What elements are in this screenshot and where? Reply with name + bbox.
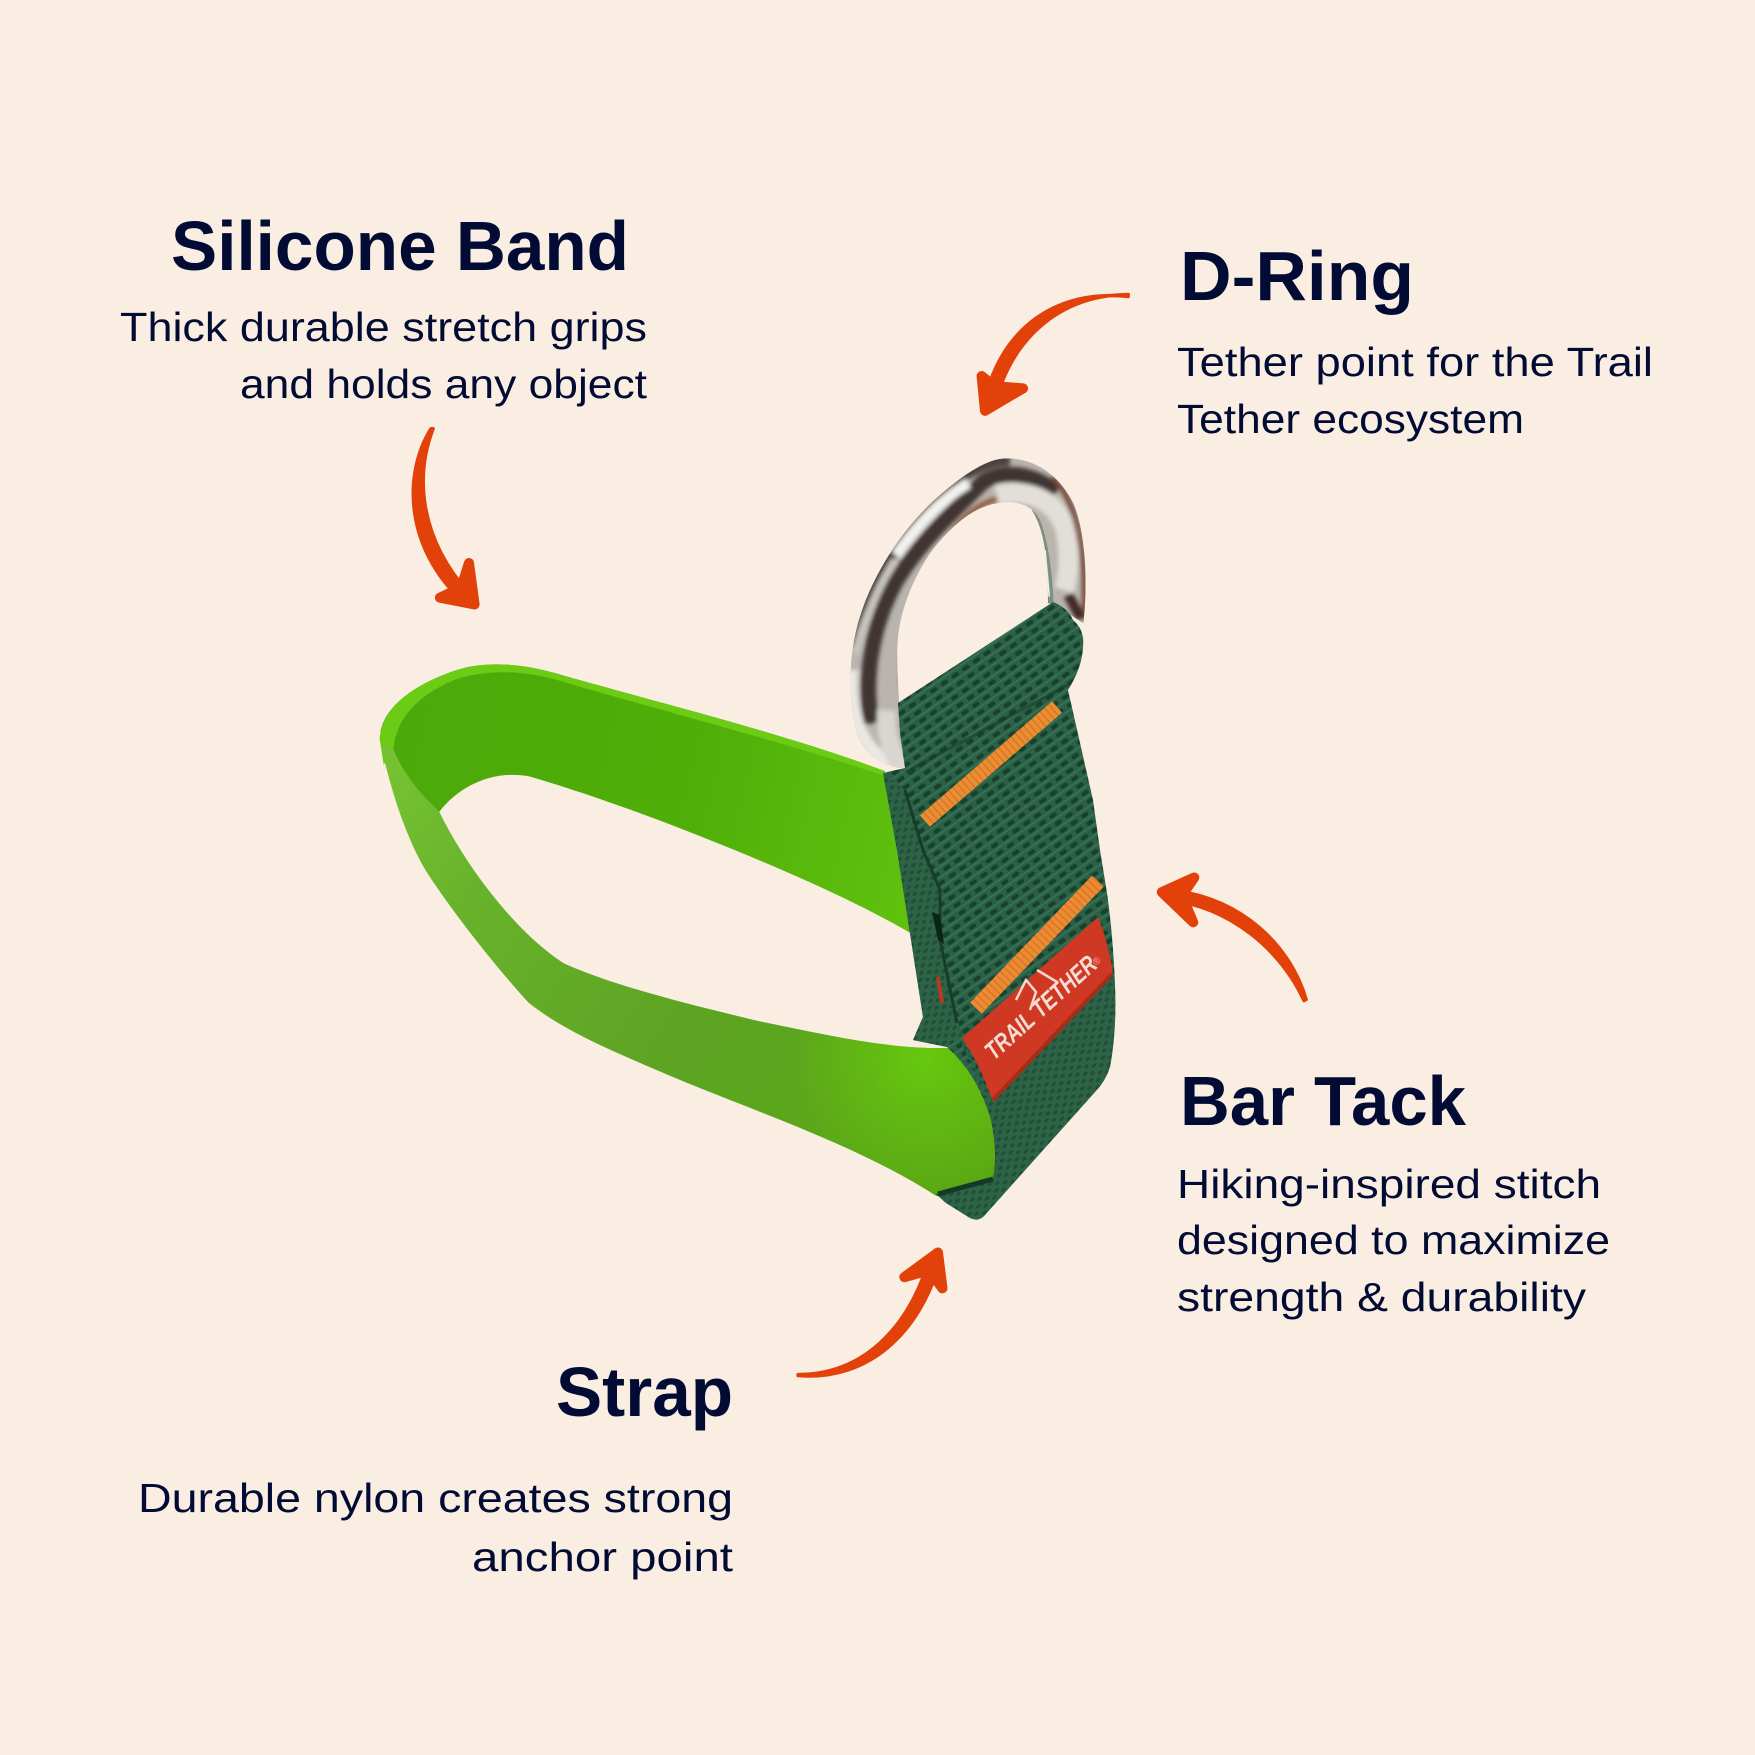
D-ring	[850, 458, 1086, 768]
band shadow on strap	[938, 1179, 993, 1194]
text block: Silicone Band description: Thick durable stretch grips	[120, 304, 647, 350]
arrow: to silicone band	[413, 429, 475, 604]
bar tack stitch: upper	[925, 707, 1057, 821]
arrow: to bar tack	[1162, 878, 1306, 1001]
nylon strap body	[883, 602, 1115, 1220]
text block: D-Ring description	[1177, 339, 1653, 442]
red brand label: ®	[1091, 955, 1104, 968]
text block: Bar Tack description: designed to maximize	[1177, 1217, 1610, 1263]
red thread peek	[938, 977, 942, 1003]
text block: Strap description: anchor point	[472, 1534, 734, 1580]
silicone band	[380, 664, 1003, 1196]
text block: Bar Tack description	[1177, 1161, 1610, 1320]
text block: Strap description: Durable nylon creates strong	[138, 1475, 733, 1521]
text block: D-Ring description: Tether ecosystem	[1177, 396, 1524, 442]
strap fold lines	[905, 685, 1068, 1023]
silicone band front	[381, 744, 1003, 1196]
arrows	[413, 294, 1306, 1376]
bar tack stitch: lower	[976, 881, 1098, 1008]
D-ring flange glint	[1045, 550, 1049, 597]
strap lower-left section	[883, 773, 962, 1047]
infographic canvas	[121, 220, 1650, 1580]
dark gap in strap fold	[932, 912, 944, 944]
D-ring inner flange	[1035, 508, 1052, 603]
arrow: to strap	[798, 1252, 942, 1376]
D-ring metal body	[850, 458, 1086, 768]
product photo: Trail Tether strap	[380, 440, 1115, 1220]
red brand label	[962, 917, 1113, 1102]
silicone band back	[381, 664, 913, 935]
heading: D-Ring: D-Ring	[1180, 237, 1414, 315]
text block: Silicone Band description	[120, 304, 648, 407]
text block: Silicone Band description: and holds any object	[240, 361, 648, 407]
heading: Strap: Strap	[556, 1353, 733, 1431]
silicone band rim	[380, 664, 886, 776]
text block: Strap description	[138, 1475, 734, 1580]
text block: Bar Tack description: strength & durability	[1177, 1274, 1587, 1320]
silicone band glow near strap	[381, 744, 1003, 1196]
heading: Bar Tack: Bar Tack	[1180, 1062, 1466, 1140]
arrow: to D-ring	[982, 294, 1128, 411]
strap lower section	[936, 972, 1114, 1220]
red brand label: TRAIL TETHER	[979, 950, 1103, 1065]
heading: Silicone Band: Silicone Band	[171, 207, 629, 285]
text block: Bar Tack description: Hiking-inspired stitch	[1177, 1161, 1601, 1207]
text block: D-Ring description: Tether point for the Trail	[1177, 339, 1653, 385]
